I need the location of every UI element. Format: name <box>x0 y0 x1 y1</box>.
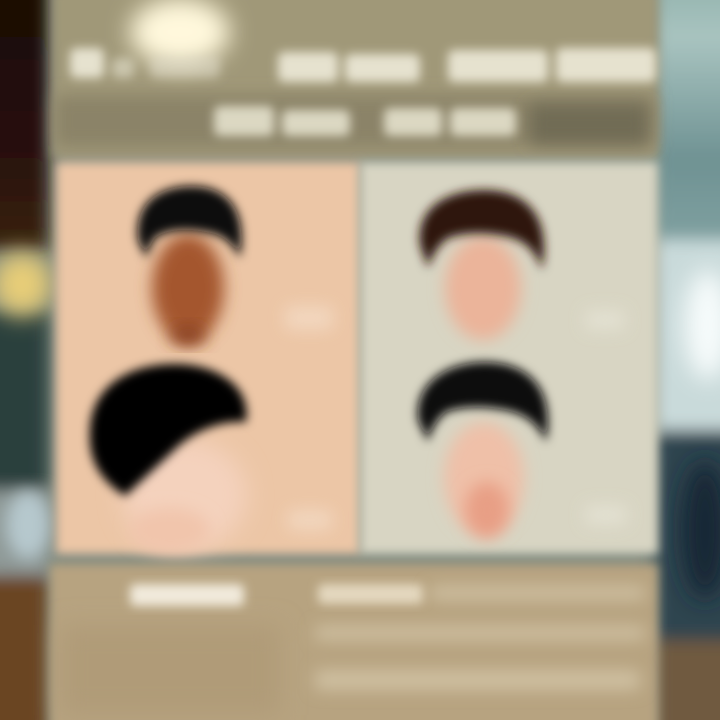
ceiling light glow <box>130 0 230 66</box>
title: illegible blurred first line <box>70 48 656 82</box>
portrait: bottom left, large black hair <box>90 364 247 552</box>
faint labels beside portraits <box>285 306 627 530</box>
portrait: top right, light skin and brown hair <box>420 190 544 340</box>
panel: left column, peach <box>56 162 360 554</box>
bottom right text lines <box>315 586 645 690</box>
poster header panel <box>52 0 658 158</box>
portrait: bottom right, light skin and black hair <box>418 362 548 538</box>
portrait: top left, dark skin and black hair <box>138 186 242 345</box>
title: illegible blurred second line <box>214 106 516 136</box>
panel: right column, grey beige <box>360 162 658 554</box>
bottom right heading <box>318 584 423 604</box>
panel: bottom information band <box>50 564 658 720</box>
bottom left shade <box>60 625 280 715</box>
bottom left heading <box>130 584 244 606</box>
